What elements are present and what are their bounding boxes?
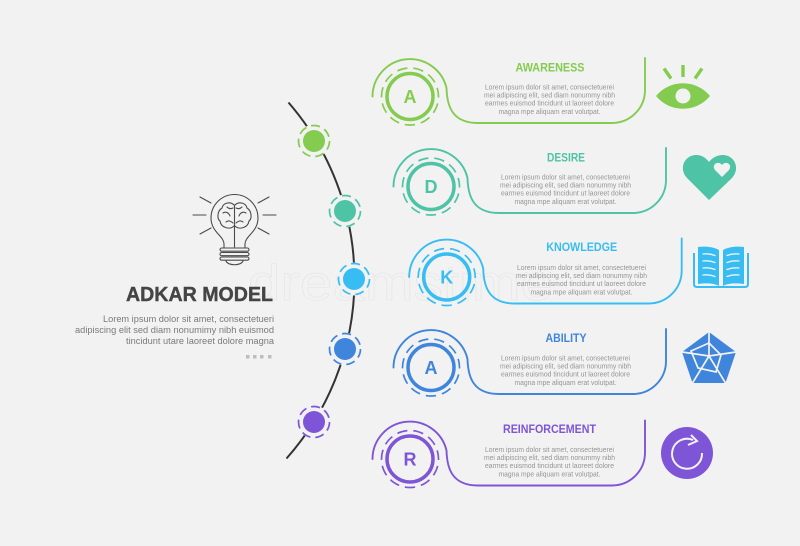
- panel: desire: mei adipiscing elit, sed diam nonummy nibh: [500, 182, 631, 190]
- panel: ability: Lorem ipsum dolor sit amet, consectetuerei: [501, 356, 630, 362]
- panel: ability: earmes euismod tincidunt ut laoreet dolore: [501, 372, 630, 379]
- panel: reinforcement: earmes euismod tincidunt ut laoreet dolore: [485, 463, 614, 470]
- panel: knowledge: K: [440, 268, 453, 288]
- pagination dots: [246, 355, 272, 358]
- icon: open book: [694, 247, 748, 287]
- panel: desire: DESIRE: [547, 150, 585, 164]
- panel: ability: [394, 329, 666, 396]
- panel: reinforcement: [372, 420, 645, 488]
- panel: desire: magna mpe aliquam erat volutpat.: [514, 199, 617, 206]
- panel: ability: magna mpe aliquam erat volutpat.: [514, 380, 617, 387]
- icon: heart: [683, 155, 736, 200]
- intro text: adipiscing elit sed diam nonumimy nibh euismod: [75, 325, 274, 335]
- timeline node: blue: [328, 332, 362, 366]
- timeline node: cyan: [338, 262, 370, 296]
- panel: reinforcement: R: [404, 450, 416, 470]
- panel: desire: D: [424, 177, 438, 197]
- panel: reinforcement: mei adipiscing elit, sed diam nonummy nibh: [484, 455, 615, 462]
- timeline node: purple: [298, 406, 330, 438]
- panel: desire: Lorem ipsum dolor sit amet, consectetuerei: [501, 174, 630, 182]
- panel: reinforcement: magna mpe aliquam erat volutpat.: [498, 471, 601, 478]
- panel: knowledge: earmes euismod tincidunt ut laoreet dolore: [517, 281, 646, 288]
- panel: desire: [394, 148, 666, 215]
- panel: knowledge: mei adipiscing elit, sed diam nonummy nibh: [516, 273, 647, 280]
- icon: eye: [656, 65, 710, 109]
- timeline node: green: [298, 124, 330, 158]
- panel: awareness: earmes euismod tincidunt ut laoreet dolore: [485, 101, 614, 108]
- intro text: Lorem ipsum dolor sit amet, consectetueri: [103, 314, 274, 324]
- intro text: [75, 314, 274, 346]
- panel: knowledge: magna mpe aliquam erat volutpat.: [530, 289, 633, 296]
- timeline curve: [286, 102, 354, 458]
- panel: awareness: A: [404, 87, 416, 107]
- panel: awareness: magna mpe aliquam erat volutpat.: [498, 109, 601, 116]
- icon: pentagon radar: [682, 332, 736, 383]
- panel: desire: earmes euismod tincidunt ut laoreet dolore: [501, 191, 630, 198]
- panel: knowledge: [409, 238, 682, 306]
- panel: knowledge: KNOWLEDGE: [546, 240, 617, 254]
- panel: awareness: mei adipiscing elit, sed diam nonummy nibh: [484, 92, 615, 100]
- panel: knowledge: Lorem ipsum dolor sit amet, consectetuerei: [517, 265, 646, 272]
- title: ADKAR MODEL: [126, 283, 273, 306]
- panel: ability: mei adipiscing elit, sed diam nonummy nibh: [500, 364, 631, 370]
- icon: light bulb with brain: [193, 194, 276, 265]
- icon: refresh: [661, 427, 713, 479]
- panel: reinforcement: Lorem ipsum dolor sit amet, consectetuerei: [485, 447, 614, 454]
- intro text: tincidunt utare laoreet dolore magna: [126, 336, 274, 346]
- panel: awareness: Lorem ipsum dolor sit amet, consectetuerei: [485, 84, 614, 92]
- panel: awareness: AWARENESS: [516, 60, 584, 74]
- panel: awareness: [372, 58, 645, 125]
- panel: ability: A: [424, 358, 438, 378]
- watermark: dreamstime: [248, 255, 553, 311]
- panel: reinforcement: REINFORCEMENT: [503, 422, 597, 436]
- timeline node: teal: [328, 194, 362, 228]
- panel: ability: ABILITY: [546, 331, 586, 345]
